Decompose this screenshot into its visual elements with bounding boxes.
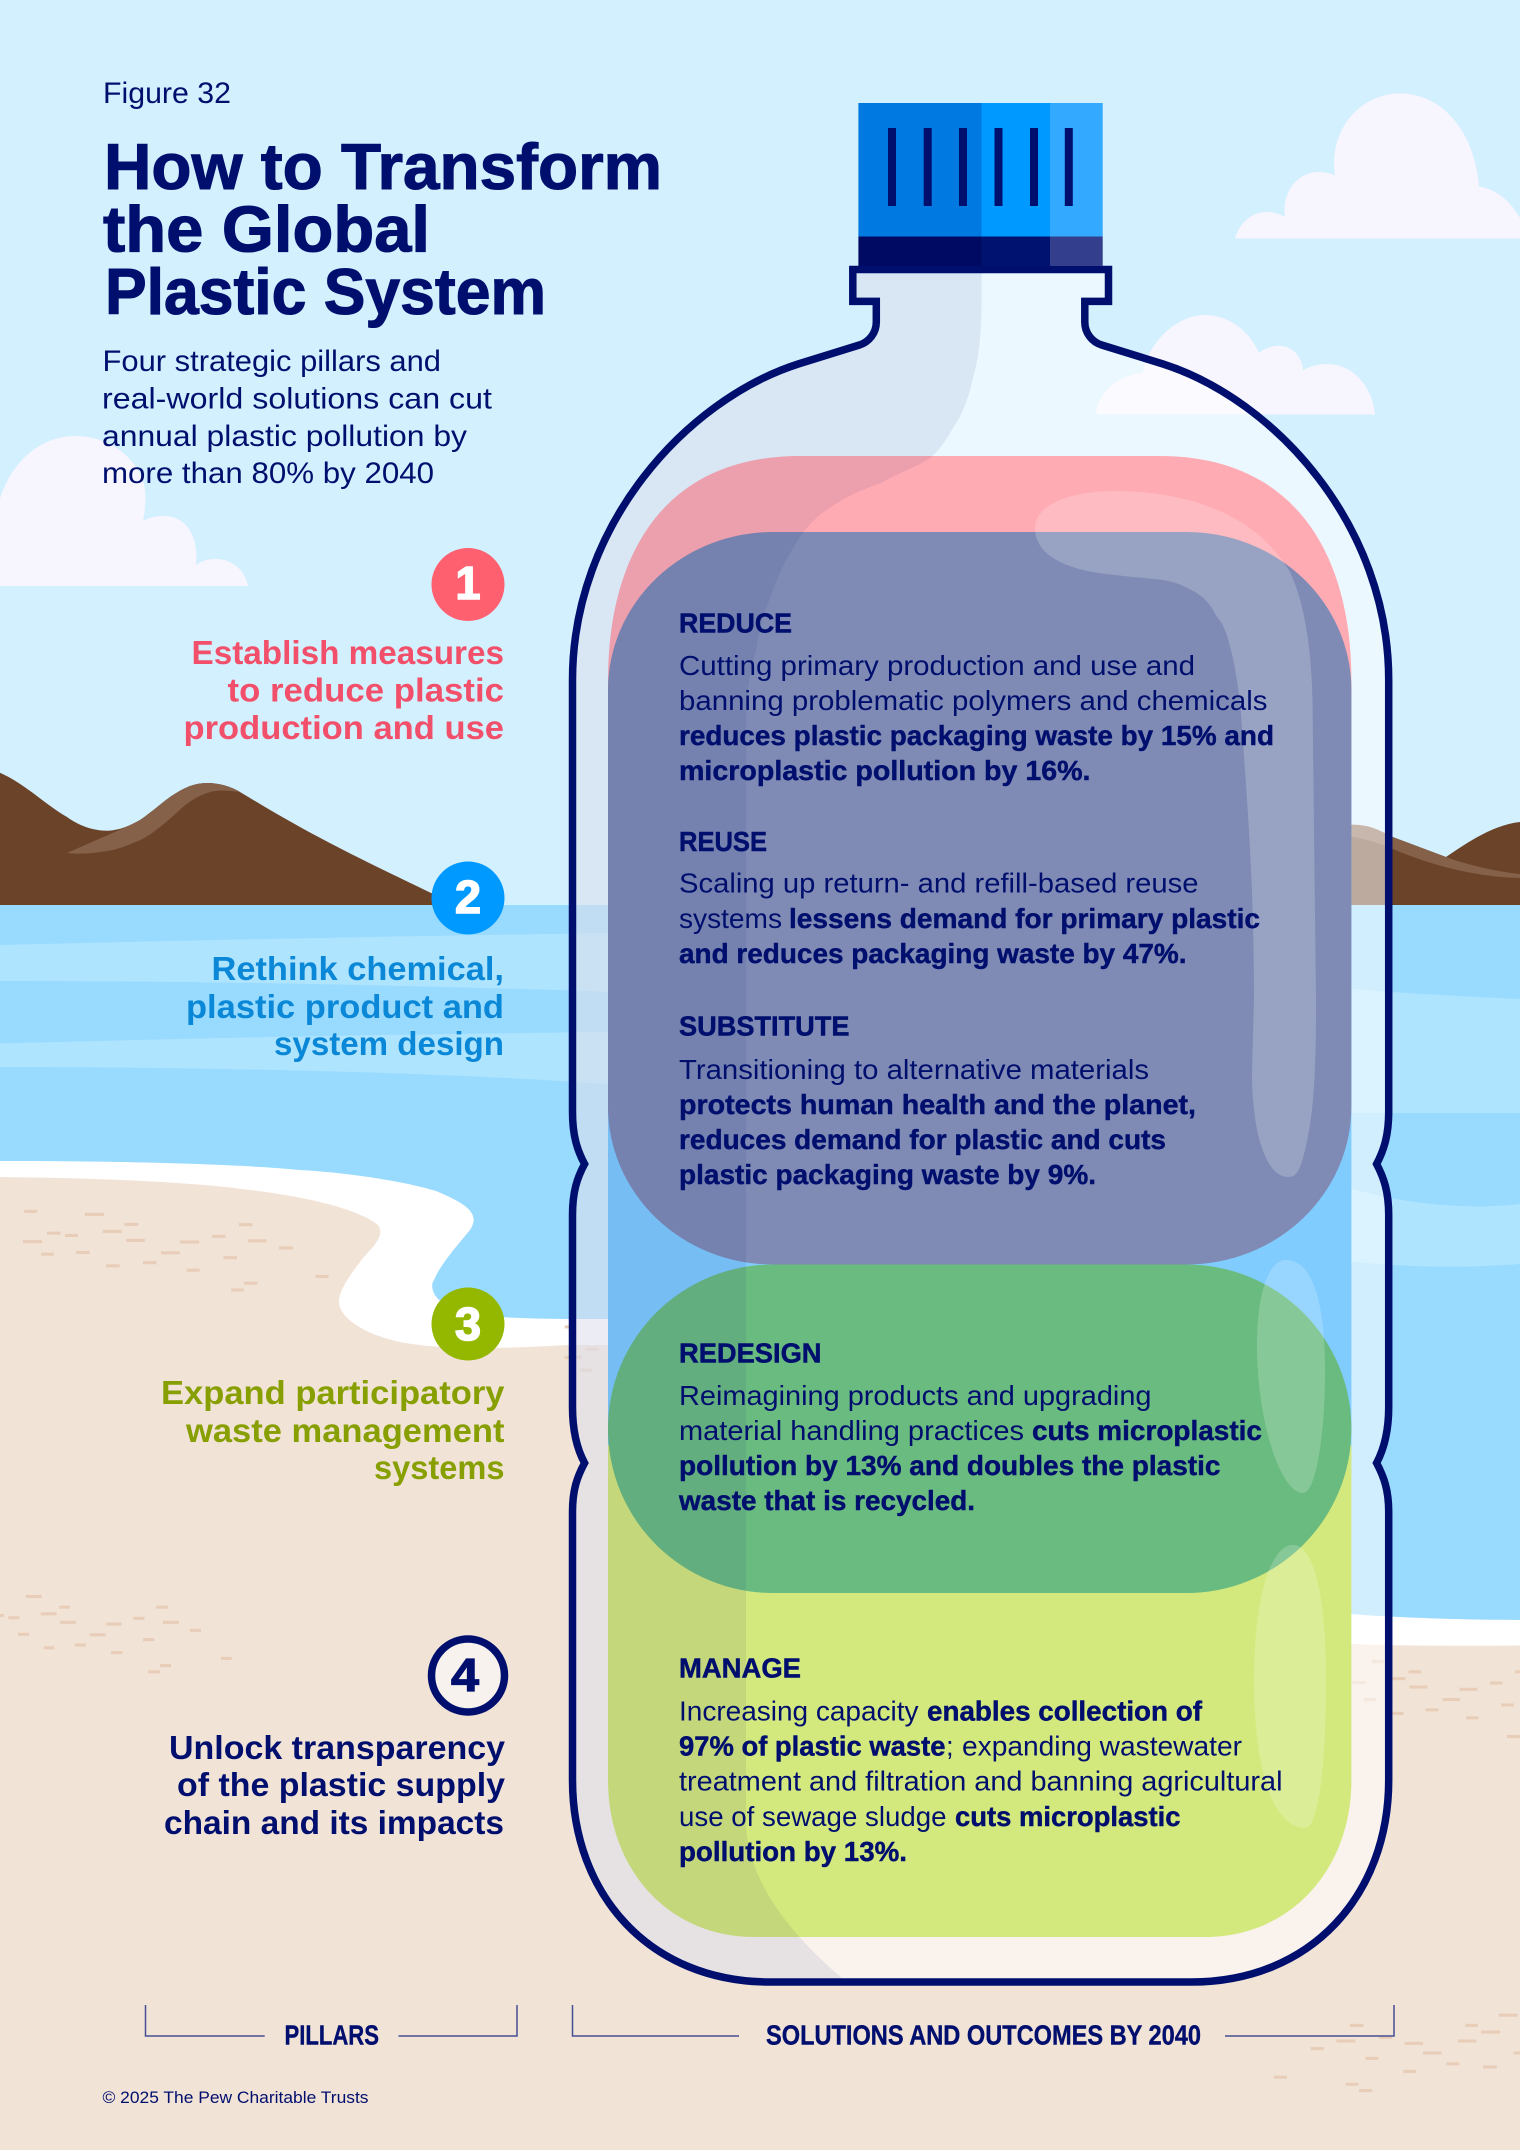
beach sand — [0, 905, 1520, 2150]
bracket label: pillars: PILLARS — [284, 2020, 379, 2050]
solution text: substitute: protects human health and the planet, — [679, 1089, 1196, 1120]
solution text: reuse: lessens demand for primary plastic — [789, 903, 1260, 934]
bracket label: pillars — [146, 2005, 517, 2050]
pillar 2 number badge — [432, 862, 504, 934]
pillar 2 number badge: 2 — [455, 871, 481, 923]
pillar 1 — [184, 548, 504, 746]
solution text: redesign: waste that is recycled. — [678, 1485, 975, 1516]
solution text: manage: pollution by 13%. — [679, 1836, 907, 1867]
solution text: manage: cuts microplastic — [955, 1801, 1180, 1832]
solution text: reduce — [679, 608, 1274, 786]
pillar 4 number badge: 4 — [451, 1649, 479, 1701]
bottle glass fill — [572, 270, 1389, 1982]
solution text: reduce: Cutting primary production and use and — [679, 650, 1195, 681]
solution text: reuse: Scaling up return- and refill-based reuse — [679, 868, 1198, 898]
solution text: manage: use of sewage sludge — [679, 1801, 946, 1832]
solution text: manage: treatment and filtration and banning agricultural — [679, 1766, 1282, 1796]
solution text: substitute: SUBSTITUTE — [679, 1010, 850, 1042]
solution text: redesign: REDESIGN — [679, 1338, 822, 1368]
subtitle: more than 80% by 2040 — [102, 457, 434, 490]
solution text: substitute: plastic packaging waste by 9%. — [679, 1159, 1096, 1190]
pillar 3 number badge: 3 — [455, 1298, 481, 1350]
pillar 2 text: Rethink chemical, — [212, 950, 504, 987]
subtitle — [102, 345, 493, 490]
bottle highlight: middle right — [1257, 1260, 1325, 1493]
solution text: redesign: pollution by 13% and doubles the plastic — [679, 1450, 1220, 1481]
pillar 4 — [164, 1639, 506, 1841]
solution text: reduce: REDUCE — [679, 608, 792, 638]
bottle highlight: lower right — [1254, 1545, 1326, 1828]
sand texture: lower left — [0, 1596, 232, 1672]
bottle outline — [572, 270, 1389, 1982]
pillar 3 text: Expand participatory — [161, 1374, 505, 1411]
pillar 4 text: Unlock transparency — [169, 1729, 506, 1766]
title — [103, 130, 662, 328]
pillar 2 text: system design — [274, 1025, 504, 1062]
solution text: redesign — [678, 1338, 1262, 1516]
title: Plastic System — [105, 255, 546, 328]
pillar 2 text: plastic product and — [186, 988, 504, 1025]
panel: pink reduce layer — [608, 456, 1351, 760]
solution text: reduce: reduces plastic packaging waste by 15% and — [679, 720, 1274, 751]
pillar 3 text: systems — [374, 1449, 504, 1486]
bottle highlight: upper right — [1035, 491, 1316, 1177]
solution text: substitute: Transitioning to alternative materials — [679, 1054, 1149, 1085]
subtitle: annual plastic pollution by — [102, 420, 467, 453]
mountains: left — [0, 773, 470, 905]
pillar 3 — [161, 1288, 505, 1486]
copyright: © 2025 The Pew Charitable Trusts — [102, 2088, 368, 2107]
sand texture: right — [1274, 1662, 1520, 2091]
solution text: substitute — [679, 1010, 1196, 1190]
solution text: reuse: and reduces packaging waste by 47%. — [679, 938, 1186, 969]
solution text: manage: expanding wastewater — [962, 1730, 1242, 1762]
panel: slate blue reduce reuse substitute — [608, 532, 1351, 1264]
pillar 1 text: production and use — [184, 709, 504, 746]
subtitle: Four strategic pillars and — [102, 345, 441, 378]
mountains: right — [1340, 822, 1520, 905]
pillar 2 — [186, 862, 504, 1062]
pillar 1 number badge: 1 — [456, 557, 480, 609]
solution text: manage: MANAGE — [679, 1652, 801, 1684]
pillar 1 text — [184, 634, 504, 746]
solution text: manage: 97% of plastic waste — [679, 1730, 946, 1762]
panel: yellow-green manage layer — [608, 1445, 1351, 1937]
panel: blue redesign layer — [608, 680, 1351, 1450]
sand texture: upper left — [23, 1211, 599, 1370]
solution text: manage — [679, 1652, 1282, 1867]
cloud: top right — [1235, 94, 1520, 238]
cloud: middle behind bottle — [1096, 315, 1375, 414]
solution text: reuse: REUSE — [679, 826, 767, 857]
pillar 4 text: of the plastic supply — [177, 1766, 506, 1803]
solution text: reduce: microplastic pollution by 16%. — [679, 755, 1090, 786]
figure label: Figure 32 — [103, 77, 231, 110]
pillar 4 text — [164, 1729, 506, 1841]
solution text: reduce: banning problematic polymers and chemicals — [679, 685, 1268, 716]
pillar 4 number badge — [432, 1639, 504, 1712]
bottle cap — [858, 103, 1103, 266]
solution text: redesign: material handling practices — [679, 1415, 1024, 1446]
solution text: manage: enables collection of — [927, 1696, 1203, 1726]
title: How to Transform — [104, 130, 662, 203]
bracket label: solutions and outcomes — [572, 2005, 1394, 2050]
solution text: manage: ; — [946, 1730, 954, 1762]
solution text: redesign: Reimagining products and upgrading — [679, 1380, 1152, 1411]
solution text: manage: Increasing capacity — [679, 1696, 919, 1726]
panel: green redesign — [608, 1264, 1351, 1593]
pillar 1 text: Establish measures — [192, 634, 504, 671]
solution text: reuse: systems — [679, 903, 782, 934]
bottle left side shadow — [560, 262, 982, 1985]
solution text: reuse — [679, 826, 1260, 969]
solution text: substitute: reduces demand for plastic and cuts — [679, 1124, 1166, 1155]
pillar 2 text — [186, 950, 504, 1062]
shoreline foam — [0, 1000, 1520, 1646]
pillar 4 text: chain and its impacts — [164, 1804, 504, 1841]
pillar 3 text — [161, 1374, 505, 1486]
cloud: left — [0, 436, 248, 586]
pillar 1 number badge — [432, 548, 504, 621]
ocean — [0, 905, 1520, 1620]
solution text: redesign: cuts microplastic — [1032, 1415, 1262, 1446]
pillar 1 text: to reduce plastic — [228, 672, 504, 708]
pillar 3 text: waste management — [185, 1412, 505, 1449]
pillar 3 number badge — [432, 1288, 504, 1360]
subtitle: real-world solutions can cut — [102, 382, 493, 416]
ocean wave bands — [0, 933, 1520, 1267]
bracket label: solutions and outcomes: SOLUTIONS AND OUTCOMES BY 2040 — [766, 2020, 1201, 2050]
title: the Global — [103, 192, 430, 266]
